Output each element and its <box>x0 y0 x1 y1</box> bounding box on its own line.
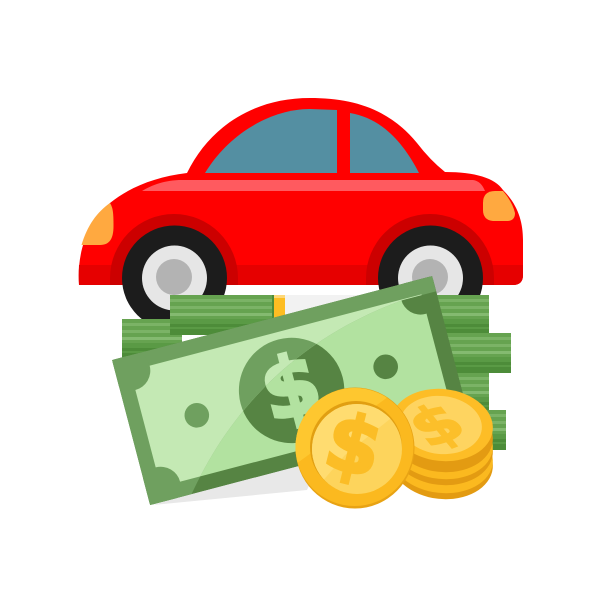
top coin face <box>388 384 496 466</box>
stack right top <box>437 295 489 333</box>
stack upper left <box>170 295 274 335</box>
stack bottom right <box>486 410 506 450</box>
car <box>79 98 523 330</box>
inner ring shadow <box>310 401 402 493</box>
front wheel arch <box>110 214 238 285</box>
front coin <box>296 388 414 508</box>
top coin side <box>388 395 496 477</box>
middle coin <box>388 404 496 490</box>
bill shadow <box>153 440 330 505</box>
left headlight <box>82 203 114 245</box>
stack right lower middle <box>458 373 489 410</box>
bottom coin <box>388 418 496 504</box>
coin face <box>312 404 402 494</box>
front window <box>205 109 337 173</box>
coin face highlight <box>312 404 390 480</box>
yellow band <box>274 295 285 335</box>
light layer of bill <box>112 276 436 505</box>
coin edge <box>296 388 414 508</box>
dark layer of bill: $ <box>251 335 331 441</box>
illustration: car, cash and coins <box>78 98 523 508</box>
rear window <box>350 113 419 173</box>
back shadow strip <box>285 295 435 345</box>
coin dollar: $ <box>316 396 391 496</box>
stack right wide <box>447 333 511 373</box>
light layer of bill: $ <box>251 335 331 441</box>
stack lower left <box>122 319 182 358</box>
cash stacks behind bill <box>122 295 511 450</box>
dark layer of bill <box>111 270 474 505</box>
right headlight <box>483 191 515 221</box>
front wheel <box>122 226 227 330</box>
coin rim highlight <box>296 388 387 462</box>
car body <box>79 98 523 285</box>
top coin dollar: $ <box>395 391 479 460</box>
rear wheel arch <box>366 214 494 285</box>
lower body shade <box>79 265 523 285</box>
top coin inner face <box>397 392 485 458</box>
rear coin stack <box>388 384 496 504</box>
dollar bill <box>106 270 474 511</box>
rear wheel <box>378 226 483 330</box>
body highlight stripe <box>142 180 485 191</box>
coin rim <box>296 388 414 506</box>
